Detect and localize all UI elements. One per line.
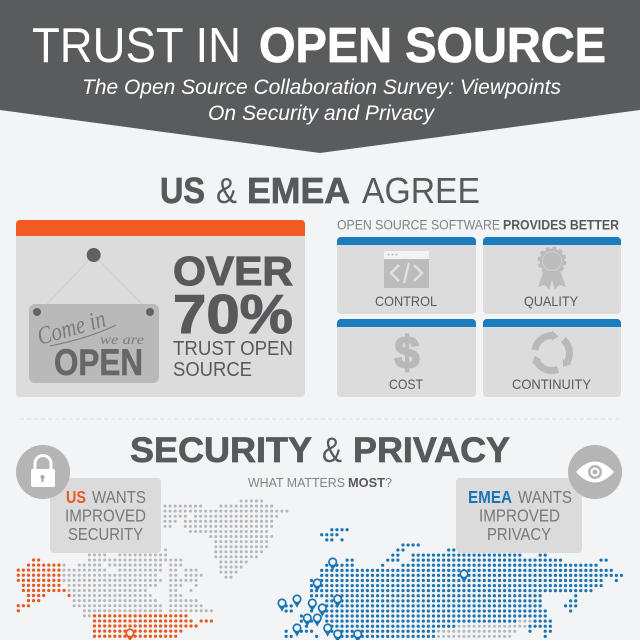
heading: security and privacy <box>130 431 510 470</box>
dot map: United States and Alaska <box>18 560 211 636</box>
icon: open sign <box>29 248 159 383</box>
icon: open sign: OPEN <box>54 342 143 383</box>
heading: US and EMEA agree: & <box>216 170 237 211</box>
icon: dollar sign: $ <box>394 327 420 378</box>
callout: US wants improved security: IMPROVED <box>65 506 146 526</box>
card: cost: COST <box>389 376 423 392</box>
callout: EMEA wants improved privacy: PRIVACY <box>487 524 551 544</box>
callout: EMEA wants improved privacy: EMEA <box>468 487 512 507</box>
heading: security and privacy: & <box>322 431 342 470</box>
title: OPEN SOURCE <box>259 19 606 73</box>
icon: open sign: we are <box>100 333 144 348</box>
dot map: Europe, Middle East and Asia <box>286 530 621 636</box>
title: TRUST IN <box>32 19 241 73</box>
callout: US wants improved security <box>50 478 161 553</box>
statistic text: TRUST OPEN <box>173 338 293 360</box>
grey dots of South Asia <box>439 621 530 636</box>
subtitle: On Security and Privacy <box>208 102 435 125</box>
panel: over 70% trust open source <box>16 220 305 397</box>
card: quality <box>483 237 621 314</box>
subtitle: The Open Source Collaboration Survey: Viewpoints <box>82 76 561 99</box>
callout: EMEA wants improved privacy: IMPROVED <box>479 506 560 526</box>
callout: US wants improved security: SECURITY <box>68 524 143 544</box>
subheading: what matters most <box>248 476 392 490</box>
callout: US wants improved security: WANTS <box>92 487 146 507</box>
statistic text: OVER <box>173 248 293 294</box>
header banner <box>0 0 640 153</box>
card: cost <box>337 319 476 397</box>
icon: eye <box>568 445 622 499</box>
callout: US wants improved security: US <box>66 487 86 507</box>
heading: provides better: OPEN SOURCE SOFTWARE <box>337 218 500 232</box>
heading: US and EMEA agree: AGREE <box>362 170 480 211</box>
dot map: North America <box>64 550 211 616</box>
statistic text <box>173 248 293 381</box>
icon: cycle arrows <box>529 330 580 379</box>
heading: US and EMEA agree <box>160 170 480 211</box>
subtitle <box>82 76 561 125</box>
card: control <box>337 237 476 314</box>
icon: padlock <box>16 445 70 499</box>
heading: security and privacy: PRIVACY <box>353 431 510 470</box>
statistic text: 70% <box>173 283 293 345</box>
card: continuity: CONTINUITY <box>512 376 592 392</box>
subheading: what matters most: ? <box>385 476 392 490</box>
callout: EMEA wants improved privacy: WANTS <box>518 487 572 507</box>
heading: provides better <box>337 218 619 232</box>
card: quality: QUALITY <box>524 293 579 309</box>
title <box>32 19 606 73</box>
dot map: Greenland <box>165 501 287 577</box>
heading: security and privacy: SECURITY <box>130 431 312 470</box>
icon: code window <box>384 251 429 288</box>
location pins <box>125 557 469 640</box>
card: control: CONTROL <box>375 293 437 309</box>
callout: EMEA wants improved privacy <box>456 478 582 553</box>
subheading: what matters most: WHAT MATTERS <box>248 476 345 490</box>
heading: provides better: PROVIDES BETTER <box>503 218 619 232</box>
statistic text: SOURCE <box>173 359 252 381</box>
icon: rosette <box>538 248 566 290</box>
heading: US and EMEA agree: US <box>160 170 205 211</box>
icon: open sign: Come in <box>34 306 109 351</box>
subheading: what matters most: MOST <box>348 476 385 490</box>
heading: US and EMEA agree: EMEA <box>247 170 350 211</box>
Canada dots in grey <box>64 550 211 616</box>
card: continuity <box>483 319 621 397</box>
